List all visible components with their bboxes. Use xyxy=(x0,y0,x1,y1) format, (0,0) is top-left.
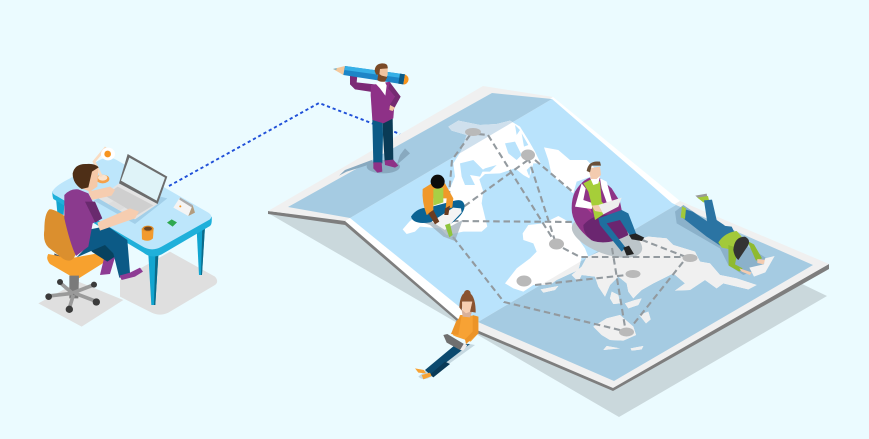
person lying on stomach with laptop xyxy=(675,194,775,277)
legs xyxy=(372,120,383,163)
woman sitting with laptop xyxy=(415,290,478,379)
lakes and bays xyxy=(460,125,532,185)
pencil xyxy=(333,66,409,84)
desk lamp xyxy=(94,147,115,183)
person at desk xyxy=(38,147,217,327)
person sitting cross-legged with laptop xyxy=(410,175,465,241)
route nodes xyxy=(465,128,698,336)
person on beanbag xyxy=(572,161,644,256)
chair xyxy=(44,209,108,313)
man xyxy=(64,164,143,280)
continents xyxy=(403,121,757,351)
dashed connection line xyxy=(169,103,400,186)
laptop xyxy=(94,154,167,224)
person with giant pencil xyxy=(333,63,410,176)
green note xyxy=(167,219,177,227)
beanbag shadow xyxy=(567,210,647,266)
torso xyxy=(371,82,395,123)
raised arm xyxy=(350,74,375,92)
floor shadows xyxy=(38,282,123,327)
map ground shadow xyxy=(268,213,827,417)
head xyxy=(377,68,388,82)
desk calendar xyxy=(173,197,195,216)
network routes xyxy=(449,133,690,331)
desk top xyxy=(52,158,212,256)
cast shadow xyxy=(339,148,410,176)
folded world map xyxy=(268,86,829,391)
desk legs xyxy=(56,198,205,305)
illustration: remote team working around a world map xyxy=(38,63,829,417)
coffee mug xyxy=(142,226,154,241)
